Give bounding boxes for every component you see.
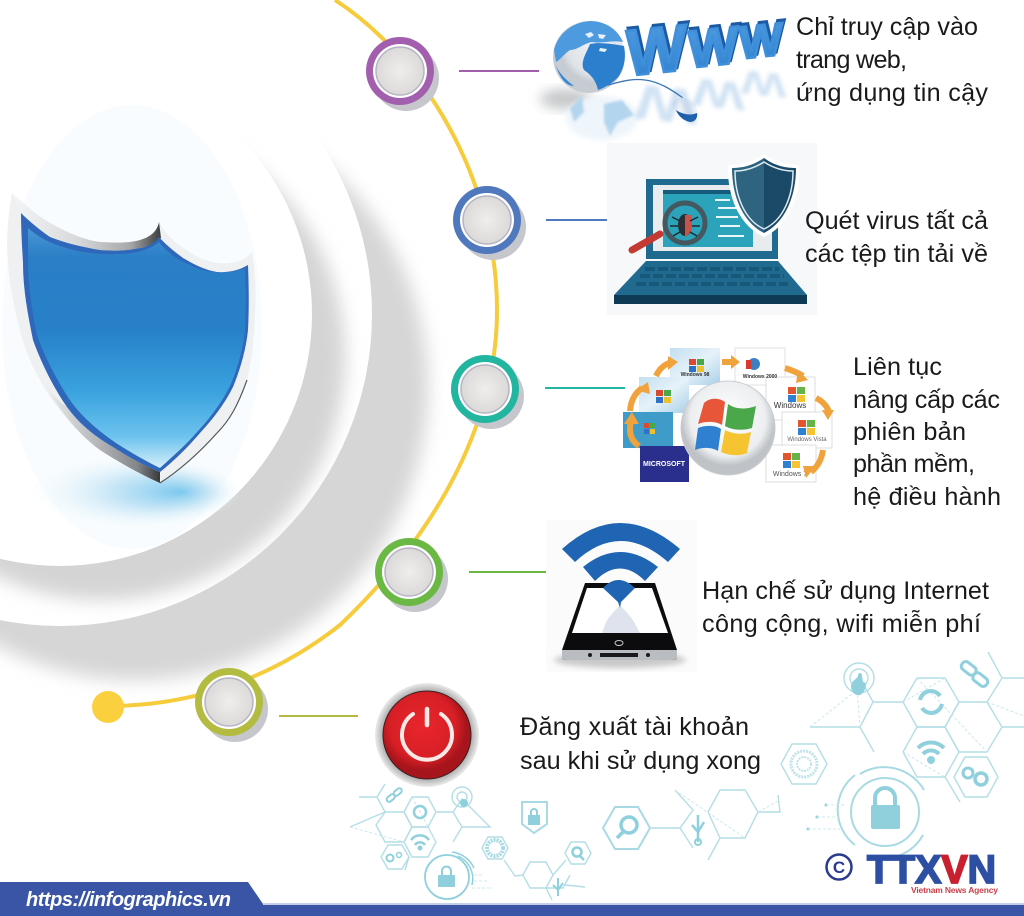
icon: windows upgrade cycle	[623, 348, 834, 482]
icon: windows upgrade cycle: Windows Vista	[787, 437, 827, 443]
node: purple	[366, 37, 439, 111]
icon: wifi phone	[546, 520, 697, 672]
icon: windows upgrade cycle: Windows 2000	[743, 374, 777, 380]
text: item 3	[853, 353, 1001, 511]
decoration: tech network bottom	[350, 784, 780, 900]
text: item 3: Liên tục	[853, 353, 942, 381]
icon: windows upgrade cycle: Windows	[774, 401, 806, 410]
heading: www letters: W	[741, 63, 787, 106]
text: item 1: Chỉ truy cập vào	[796, 13, 978, 41]
logo: TTXVN: Vietnam News Agency	[911, 885, 998, 895]
footer band	[0, 882, 1024, 916]
text: item 2: Quét virus tất cả	[805, 207, 989, 235]
node: blue	[453, 186, 526, 260]
connector: olive	[279, 715, 358, 717]
icon: blue shield	[7, 193, 256, 483]
connector: blue	[546, 219, 626, 221]
icon: large padlock	[806, 767, 924, 858]
concentric shield backdrop	[0, 2, 428, 680]
icon: red power button	[375, 683, 479, 787]
text: item 1: ứng dụng tin cậy	[796, 79, 988, 107]
text: item 1	[796, 13, 988, 107]
node: green	[375, 538, 448, 612]
icon: windows upgrade cycle: MICROSOFT	[643, 461, 686, 468]
connector: green	[469, 571, 549, 573]
text: item 2: các tệp tin tải về	[805, 240, 988, 268]
decoration: tech network top right	[781, 652, 1024, 802]
yellow timeline curve	[108, 0, 497, 706]
heading: www letters: W	[692, 69, 745, 118]
heading: www letters: W	[626, 10, 687, 90]
icon: www globe and mouse	[540, 21, 697, 140]
heading: www letters: W	[628, 7, 689, 87]
text: item 2	[805, 207, 989, 268]
icon: windows upgrade cycle: Windows 98	[681, 372, 710, 378]
timeline start dot	[92, 691, 124, 723]
node: olive	[195, 668, 268, 742]
text: item 5: Đăng xuất tài khoản	[520, 713, 749, 741]
heading: www letters: W	[688, 16, 739, 80]
heading: www letters	[626, 7, 787, 135]
text: item 3: phiên bản	[853, 418, 966, 446]
footer band: https://infographics.vn	[26, 889, 231, 911]
heading: www letters: W	[635, 73, 698, 135]
text: item 4	[702, 577, 989, 638]
logo: TTXVN: TTXVN	[867, 848, 996, 892]
text: item 1: trang web,	[796, 46, 907, 74]
text: item 5	[520, 713, 761, 775]
text: item 3: nâng cấp các	[853, 386, 1000, 414]
heading: www letters: W	[741, 10, 785, 66]
icon: laptop virus scan	[607, 143, 817, 315]
logo: TTXVN: C	[833, 858, 845, 877]
text: item 4: Hạn chế sử dụng Internet	[702, 577, 989, 605]
text: item 4: công cộng, wifi miễn phí	[702, 609, 981, 638]
text: item 5: sau khi sử dụng xong	[520, 747, 761, 775]
text: item 3: hệ điều hành	[853, 483, 1001, 511]
heading: www letters: W	[690, 13, 741, 77]
connector: purple	[459, 70, 539, 72]
connector: teal	[545, 387, 625, 389]
heading: www letters: W	[739, 13, 783, 69]
icon: windows upgrade cycle: Windows 7	[773, 471, 807, 478]
node: teal	[451, 355, 524, 429]
text: item 3: phần mềm,	[853, 450, 975, 478]
